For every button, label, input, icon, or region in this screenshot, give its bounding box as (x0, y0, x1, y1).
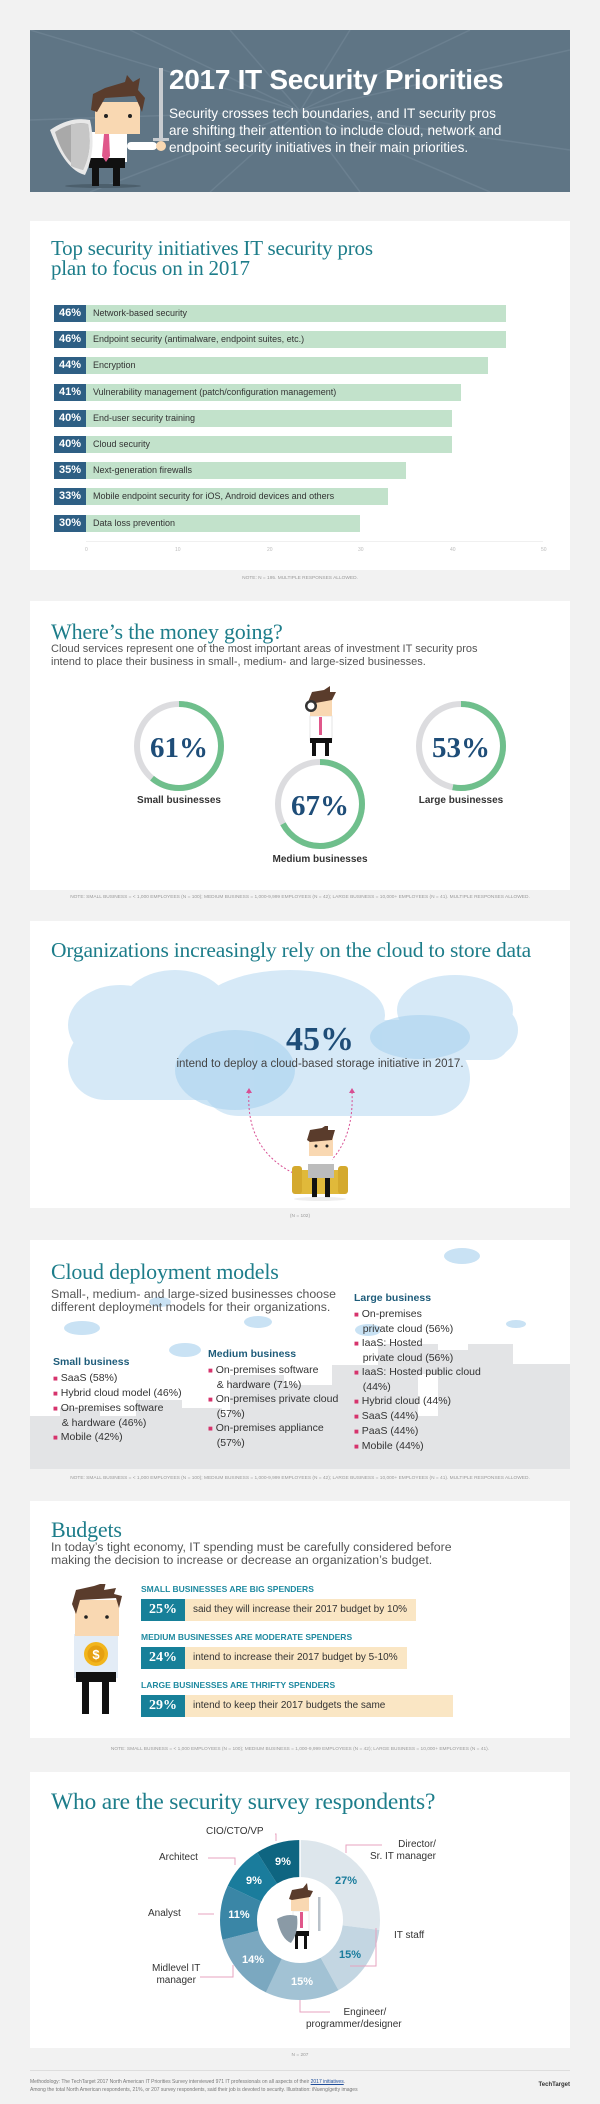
budget row: medium: MEDIUM BUSINESSES ARE MODERATE SPENDERS (141, 1632, 352, 1642)
budget row: large: 29% (149, 1698, 177, 1713)
axis: 10 (175, 547, 181, 553)
bar chart: initiatives: Vulnerability management (patch/configuration management) (93, 387, 336, 397)
panel: where's the money going (30, 601, 570, 890)
donut: medium businesses (272, 759, 368, 865)
bar: end-user training (54, 410, 452, 427)
list: large business: ■ Mobile (44%) (354, 1440, 424, 1452)
bar chart: initiatives: End-user security training (93, 413, 195, 423)
list: small business (53, 1356, 182, 1443)
heading: Cloud deployment models (51, 1259, 279, 1284)
text (51, 643, 478, 668)
label: Midlevel IT manager: Midlevel IT (152, 1963, 200, 1974)
bar: cloud security (54, 436, 452, 453)
subtitle: endpoint security initiatives in their main priorities. (169, 140, 468, 155)
bar: DLP (54, 515, 360, 532)
icon: center knight (277, 1883, 320, 1949)
budget row: small: SMALL BUSINESSES ARE BIG SPENDERS (141, 1584, 314, 1594)
note: NOTE: N = 195. MULTIPLE RESPONSES ALLOWED. (242, 576, 358, 581)
donut chart: respondents: 15% (291, 1976, 313, 1988)
bar chart: initiatives: Endpoint security (antimalware, endpoint suites, etc.) (93, 334, 304, 344)
list: large business: ■ Hybrid cloud (44%) (354, 1395, 451, 1407)
subtitle: are shifting their attention to include cloud, network and (169, 123, 502, 138)
label: Engineer: programmer/designer (306, 2019, 402, 2030)
heading: Who are the security survey respondents? (51, 1789, 435, 1815)
bar chart: initiatives: Cloud security (93, 439, 150, 449)
list: small business: & hardware (46%) (62, 1417, 146, 1429)
donut: small businesses (134, 701, 224, 806)
note: NOTE: SMALL BUSINESS = < 1,000 EMPLOYEES (N = 100); MEDIUM BUSINESS = 1,000-9,999 EMPLOYEES (N = 42); LARGE BUSINESS = 10,000+ EMPLOYEES (N = 41). MULTIPLE RESPONSES ALLOWED. (70, 1476, 530, 1481)
panel: top security initiatives (30, 221, 570, 570)
label: Analyst: Analyst (148, 1908, 181, 1919)
donut: small businesses: Small businesses (137, 795, 221, 806)
bar chart: initiatives: Next-generation firewalls (93, 465, 192, 475)
heading: Budgets (51, 1517, 122, 1542)
list: large business: ■ On-premises (354, 1308, 422, 1320)
bar chart: initiatives: 50 (541, 547, 547, 553)
donut chart: respondents: 15% (339, 1949, 361, 1961)
note: N = 207 (292, 2053, 308, 2058)
icon: person holding coin: $ (92, 1647, 100, 1662)
note: NOTE: SMALL BUSINESS = < 1,000 EMPLOYEES (N = 100); MEDIUM BUSINESS = 1,000-9,999 EMPLOYEES (N = 42); LARGE BUSINESS = 10,000+ EMPLOYEES (N = 41). (111, 1747, 489, 1752)
panel: budgets (30, 1501, 570, 1738)
donut chart: respondents (198, 1834, 382, 2012)
list: medium business: Medium business (208, 1348, 296, 1360)
heading: Top security initiatives IT security pros plan to focus on in 2017 (51, 236, 373, 280)
text: In today’s tight economy, IT spending must be carefully considered before making the decision to increase or decrease an organization’s budget. (51, 1540, 452, 1567)
donut: medium businesses: Medium businesses (272, 854, 368, 865)
bar: endpoint (54, 331, 506, 348)
bar chart: initiatives: Mobile endpoint security for iOS, Android devices and others (93, 491, 334, 501)
heading: Where’s the money going? (51, 619, 283, 644)
donut: large businesses: Large businesses (419, 795, 503, 806)
bar: encryption (54, 357, 488, 374)
axis: 30 (358, 547, 364, 553)
list: medium business (208, 1348, 338, 1449)
budget row: medium (141, 1632, 407, 1669)
label: Director (370, 1839, 436, 1862)
bar chart: initiatives: Network-based security (93, 308, 187, 318)
clouds illustration (68, 970, 518, 1116)
bar chart: initiatives (54, 305, 547, 553)
list: large business (354, 1292, 481, 1452)
list: medium business: ■ On-premises private cloud (208, 1393, 338, 1405)
bar chart: initiatives: 46% (59, 333, 81, 345)
list: small business: ■ Mobile (42%) (53, 1431, 123, 1443)
list: small business: ■ On-premises software (53, 1402, 163, 1414)
label: Midlevel IT manager: manager (156, 1975, 196, 1986)
axis: 20 (267, 547, 273, 553)
list: large business: private cloud (56%) (363, 1352, 453, 1364)
label: Director: Director/ (398, 1839, 436, 1850)
budget row: large: LARGE BUSINESSES ARE THRIFTY SPENDERS (141, 1680, 335, 1690)
label: CIO/CTO/VP: CIO/CTO/VP (206, 1826, 264, 1837)
list: medium business: & hardware (71%) (217, 1379, 301, 1391)
icon: person holding coin (72, 1584, 122, 1714)
axis: 40 (450, 547, 456, 553)
list: large business: ■ IaaS: Hosted (354, 1337, 422, 1349)
list: large business: (44%) (363, 1381, 391, 1393)
axis: 0 (85, 547, 88, 553)
note: (N = 102) (290, 1214, 310, 1219)
stat: 45%: 45% (286, 1021, 354, 1058)
bar chart: initiatives: 41% (59, 386, 81, 398)
bar chart: initiatives: 46% (59, 307, 81, 319)
arrows: dotted pink (246, 1088, 355, 1173)
bar chart: initiatives: 44% (59, 359, 81, 371)
list: large business: ■ PaaS (44%) (354, 1425, 418, 1437)
budget row: small: 25% (149, 1602, 177, 1617)
bar: network-based (54, 305, 506, 322)
list: medium business: (57%) (217, 1408, 245, 1420)
bar chart: initiatives: 35% (59, 464, 81, 476)
label: Architect: Architect (159, 1852, 198, 1863)
bar chart: initiatives: Encryption (93, 360, 136, 370)
budget row: large (141, 1680, 453, 1717)
donut chart: respondents: 27% (335, 1875, 357, 1887)
list: medium business: ■ On-premises appliance (208, 1422, 324, 1434)
text: intend to place their business in small-, medium- and large-sized businesses. (51, 656, 426, 668)
methodology text (30, 2079, 358, 2093)
list: small business: ■ SaaS (58%) (53, 1372, 117, 1384)
list: small business: ■ Hybrid cloud model (46%) (53, 1387, 182, 1399)
note: NOTE: SMALL BUSINESS = < 1,000 EMPLOYEES (N = 100); MEDIUM BUSINESS = 1,000-9,999 EMPLOYEES (N = 42); LARGE BUSINESS = 10,000+ EMPLOYEES (N = 41). MULTIPLE RESPONSES ALLOWED. (70, 895, 530, 900)
label: Engineer: Engineer/ (344, 2007, 386, 2018)
icon: person with magnifier (305, 686, 336, 756)
heading: Organizations increasingly rely on the cloud to store data (51, 938, 531, 962)
bar: firewalls (54, 462, 406, 479)
label: Director: Sr. IT manager (370, 1851, 436, 1862)
axis (86, 541, 543, 555)
donut: large businesses: 53% (432, 732, 490, 764)
bar: vulnerability (54, 384, 461, 401)
text: Cloud services represent one of the most important areas of investment IT security pros (51, 643, 478, 655)
methodology text: Methodology: The TechTarget 2017 North American IT Priorities Survey interviewed 971 IT professionals on all aspects of their 2017 initiatives. (30, 2079, 345, 2085)
donut: large businesses (416, 701, 506, 806)
list: large business: ■ IaaS: Hosted public cloud (354, 1366, 481, 1378)
budget row: medium: 24% (149, 1650, 177, 1665)
panel: cloud deployment models (30, 1240, 570, 1469)
subtitle: Security crosses tech boundaries, and IT security pros (169, 106, 496, 121)
donut chart: respondents: 11% (228, 1909, 250, 1921)
panel: cloud storage (30, 921, 570, 1208)
bar: mobile (54, 488, 388, 505)
panel: respondents (30, 1772, 570, 2048)
donut chart: respondents: 9% (275, 1856, 291, 1868)
budget row: medium: intend to increase their 2017 budget by 5-10% (193, 1652, 398, 1663)
label: IT staff: IT staff (394, 1930, 424, 1941)
list: large business: private cloud (56%) (363, 1323, 453, 1335)
list: medium business: (57%) (217, 1437, 245, 1449)
stat: 45% (176, 1021, 464, 1070)
bar chart: initiatives: Data loss prevention (93, 518, 175, 528)
icon: knight businessman (50, 68, 169, 188)
bar chart: initiatives: 30% (59, 517, 81, 529)
title: 2017 IT Security Priorities (169, 64, 503, 95)
list: medium business: ■ On-premises software (208, 1364, 318, 1376)
label: Midlevel IT manager (152, 1963, 200, 1986)
subtitle (169, 106, 502, 155)
footer (30, 2070, 570, 2100)
bar chart: initiatives: 33% (59, 490, 81, 502)
header banner (30, 30, 570, 192)
donut chart: respondents: 14% (242, 1954, 264, 1966)
logo: TechTarget (539, 2082, 570, 2088)
list: large business: Large business (354, 1292, 431, 1304)
list: large business: ■ SaaS (44%) (354, 1410, 418, 1422)
label: Engineer (306, 2007, 402, 2030)
list: small business: Small business (53, 1356, 129, 1368)
donut: small businesses: 61% (150, 732, 208, 764)
methodology text: Among the total North American respondents, 21%, or 207 survey respondents, said their job is devoted to security. Illustration: iNueng/getty images (30, 2087, 358, 2093)
budget row: large: intend to keep their 2017 budgets the same (193, 1700, 385, 1711)
banner rays background (30, 30, 570, 192)
donut: medium businesses: 67% (291, 790, 349, 822)
bar chart: initiatives: 40% (59, 412, 81, 424)
donut chart: respondents: 9% (246, 1875, 262, 1887)
text: Small-, medium- and large-sized businesses choose different deployment models for their organizations. (51, 1287, 336, 1314)
budget row: small (141, 1584, 416, 1621)
skyline background (30, 1248, 570, 1469)
budget row: small: said they will increase their 2017 budget by 10% (193, 1604, 407, 1615)
stat: 45%: intend to deploy a cloud-based storage initiative in 2017. (176, 1058, 464, 1070)
bar chart: initiatives: 40% (59, 438, 81, 450)
icon: person on sofa (292, 1126, 348, 1201)
